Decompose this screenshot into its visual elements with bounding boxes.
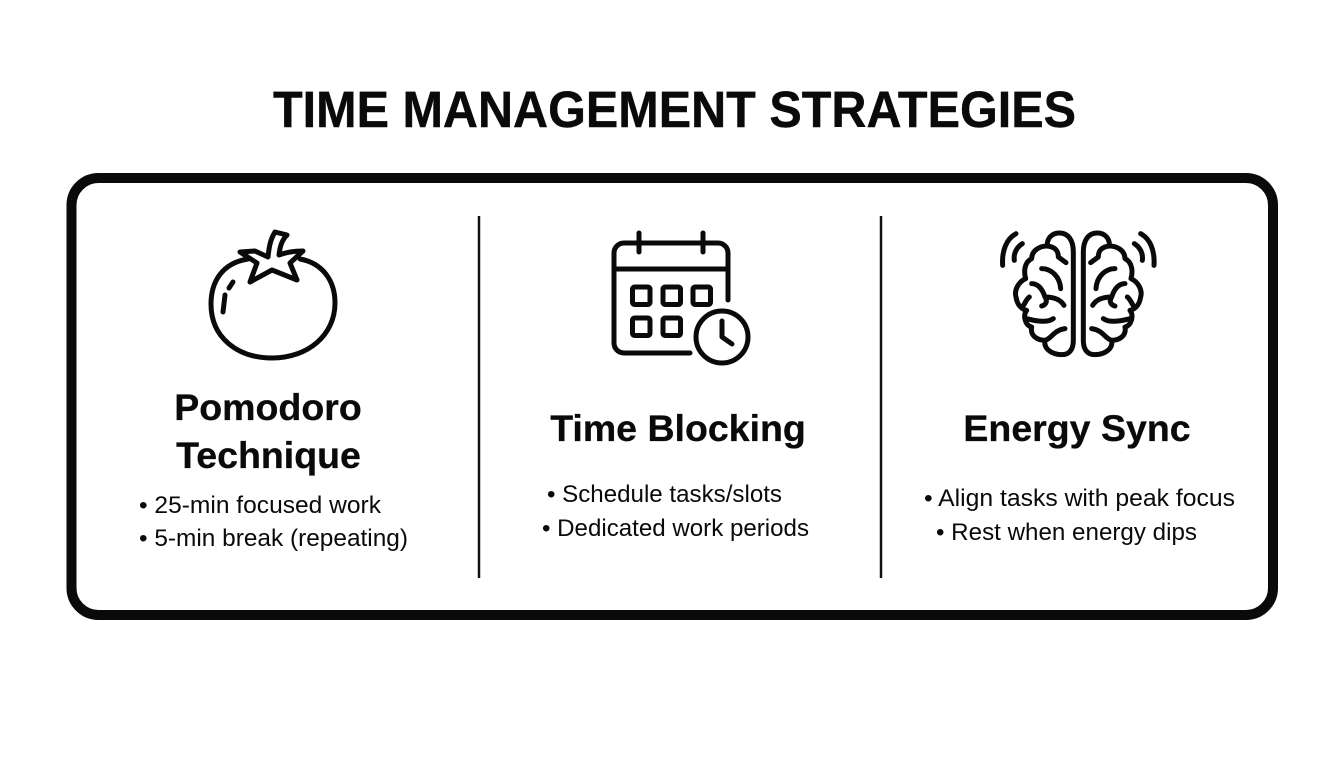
heading: Time Blocking: Time Blocking	[550, 407, 806, 449]
bullet list: Energy Sync: • Align tasks with peak focus	[924, 485, 1235, 512]
bullet list: Energy Sync: • Rest when energy dips	[936, 519, 1197, 546]
heading: Pomodoro Technique: Pomodoro	[174, 386, 362, 428]
panel: Energy Sync	[924, 233, 1235, 546]
bullet list: Time Blocking: • Schedule tasks/slots	[547, 481, 782, 508]
panel: Time Blocking	[542, 233, 809, 542]
heading: Energy Sync: Energy Sync	[963, 407, 1191, 449]
icon: tomato	[211, 232, 335, 358]
bullet list: Pomodoro: • 25-min focused work	[139, 492, 382, 519]
bullet list: Pomodoro: • 5-min break (repeating)	[139, 525, 408, 552]
icon: brain with waves	[1003, 233, 1154, 355]
bullet list: Time Blocking	[542, 481, 809, 542]
icon: calendar with clock	[614, 233, 748, 363]
panel: strategies container	[72, 178, 1273, 615]
bullet list: Pomodoro	[139, 492, 408, 552]
title: TIME MANAGEMENT STRATEGIES	[273, 81, 1076, 138]
bullet list: Energy Sync	[924, 485, 1235, 546]
bullet list: Time Blocking: • Dedicated work periods	[542, 515, 809, 542]
heading: Pomodoro Technique: Technique	[176, 434, 361, 476]
panel: Pomodoro Technique	[139, 232, 408, 552]
